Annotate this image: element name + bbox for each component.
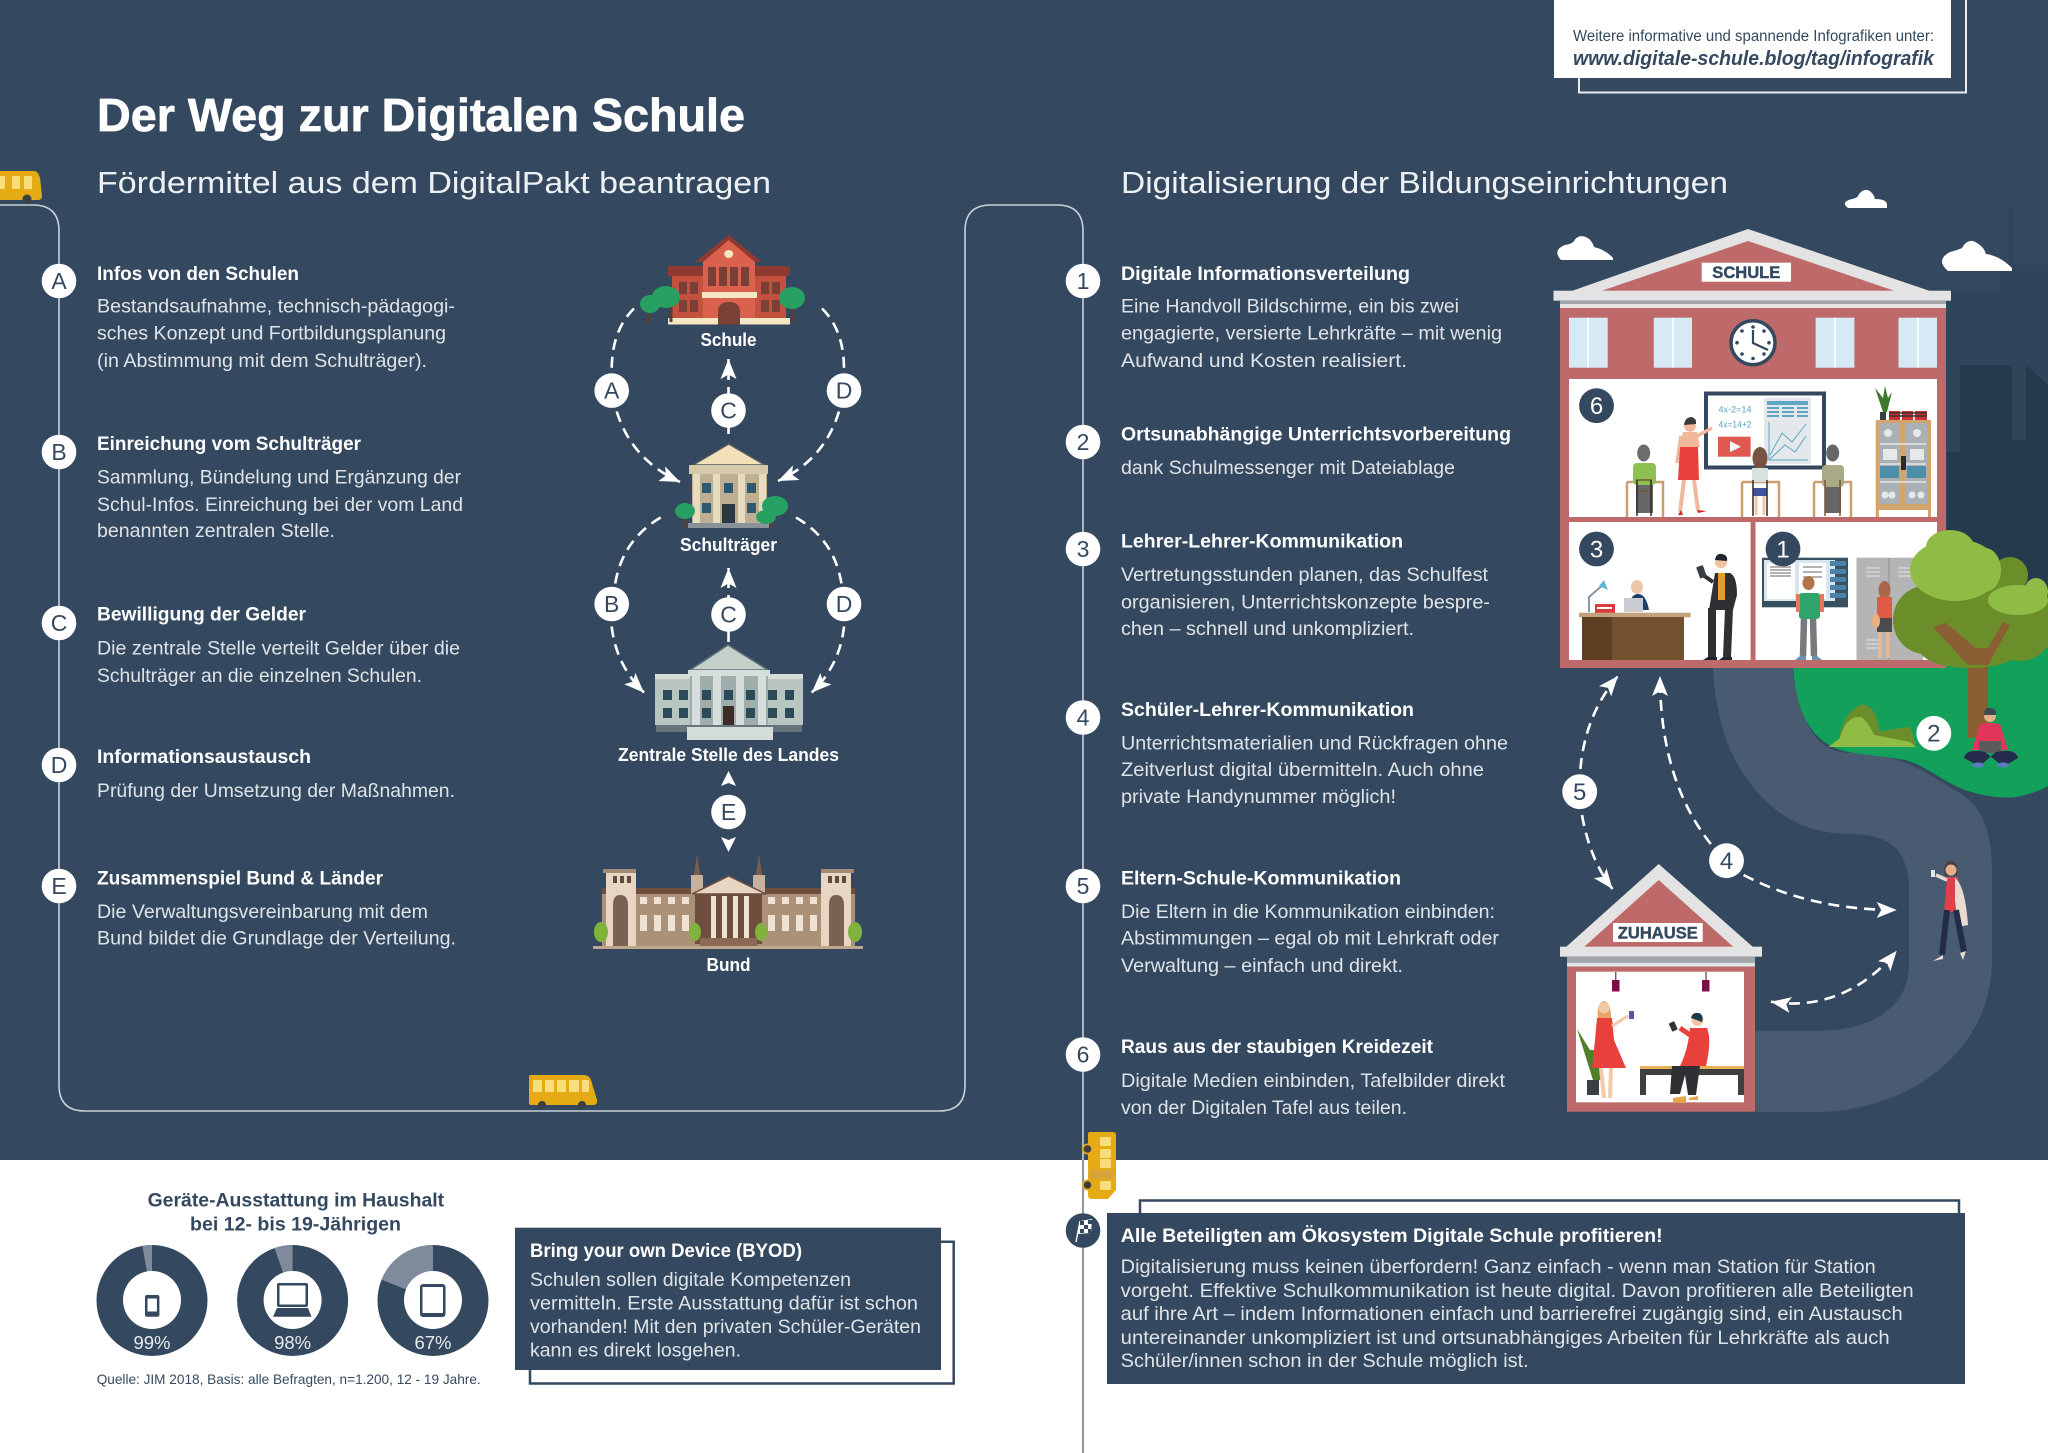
step C: C — [51, 610, 67, 636]
step 4 — [1066, 700, 1508, 808]
BYOD callout: vermitteln. Erste Ausstattung dafür ist schon — [530, 1292, 918, 1314]
step C: Die zentrale Stelle verteilt Gelder über die — [97, 638, 460, 660]
step 2: dank Schulmessenger mit Dateiablage — [1121, 457, 1455, 479]
step E: Die Verwaltungsvereinbarung mit dem — [97, 901, 428, 923]
final callout: vorgeht. Effektive Schulkommunikation ist heute digital. Davon profitieren alle Beteiligten — [1121, 1280, 1914, 1302]
BYOD callout: vorhanden! Mit den privaten Schüler-Geräten — [530, 1316, 921, 1338]
person under tree — [1964, 708, 2018, 768]
subtitle right: Digitalisierung der Bildungseinrichtungen — [1121, 165, 1728, 200]
step E: E — [51, 873, 67, 899]
main title: Der Weg zur Digitalen Schule — [97, 89, 745, 141]
bush — [1828, 705, 1916, 747]
donut: laptop 98% — [237, 1245, 348, 1356]
donut: laptop 98%: 98% — [274, 1332, 311, 1353]
donut: smartphone 99% — [96, 1245, 208, 1356]
final callout: Alle Beteiligten am Ökosystem Digitale Schule profitieren! — [1121, 1224, 1663, 1247]
final callout: auf ihre Art – indem Informationen einfach und barrierefrei zugängig sind, ein Austausch — [1121, 1303, 1903, 1325]
step E: Bund bildet die Grundlage der Verteilung. — [97, 928, 456, 950]
step 4: Zeitverlust digital übermitteln. Auch ohne — [1121, 759, 1484, 781]
step 3: Lehrer-Lehrer-Kommunikation — [1121, 532, 1403, 552]
step A: A — [51, 268, 67, 294]
building: Schulträger — [675, 444, 788, 528]
funding flow arrows — [612, 308, 844, 852]
student 2 — [1742, 447, 1780, 517]
plant — [1577, 1029, 1601, 1095]
device statistics heading — [148, 1190, 445, 1236]
walking woman — [1931, 861, 1968, 961]
tree — [1893, 530, 2048, 738]
step B: Sammlung, Bündelung und Ergänzung der — [97, 466, 461, 488]
step 4: Unterrichtsmaterialien und Rückfragen ohne — [1121, 732, 1508, 754]
step C — [42, 604, 460, 687]
link box: Weitere informative und spannende Infografiken unter: — [1573, 28, 1934, 45]
step 6: Raus aus der staubigen Kreidezeit — [1121, 1037, 1434, 1058]
BYOD callout: Bring your own Device (BYOD) — [530, 1240, 802, 1262]
flow badges: C — [720, 398, 737, 424]
notice screen — [1762, 558, 1848, 607]
map badges — [1562, 716, 1951, 878]
sign: ZUHAUSE: ZUHAUSE — [1618, 924, 1698, 942]
step 3: chen – schnell und unkompliziert. — [1121, 618, 1414, 640]
step 5: Eltern-Schule-Kommunikation — [1121, 868, 1401, 890]
step D: Prüfung der Umsetzung der Maßnahmen. — [97, 780, 455, 802]
step 6: Digitale Medien einbinden, Tafelbilder direkt — [1121, 1070, 1506, 1092]
step C: Bewilligung der Gelder — [97, 604, 307, 626]
step D: Informationsaustausch — [97, 747, 311, 768]
lawn — [1793, 640, 2048, 797]
bus bottom — [529, 1075, 597, 1109]
digital board: 4x-2=14 — [1718, 404, 1752, 416]
building: Zentrale Stelle — [655, 645, 803, 740]
donut: smartphone 99%: 99% — [133, 1332, 171, 1353]
donut: tablet 67%: 67% — [414, 1332, 452, 1353]
final callout: Schüler/innen schon in der Schule möglich ist. — [1121, 1350, 1529, 1372]
subtitle left: Fördermittel aus dem DigitalPakt beantragen — [97, 165, 771, 200]
room badges: 1 — [1776, 536, 1790, 564]
BYOD callout: Schulen sollen digitale Kompetenzen — [530, 1269, 851, 1291]
school building — [1554, 229, 1951, 668]
room badges: 3 — [1590, 536, 1603, 564]
man on bench — [1640, 1013, 1744, 1103]
white bottom section — [0, 1160, 2048, 1453]
flow badges: A — [604, 378, 620, 404]
step 3: Vertretungsstunden planen, das Schulfest — [1121, 564, 1489, 586]
dark background — [0, 0, 2048, 1160]
step 3 — [1066, 532, 1490, 640]
lab cabinet — [1875, 386, 1931, 517]
final callout — [1107, 1200, 1965, 1384]
student 1 — [1627, 444, 1664, 517]
map badges: 5 — [1573, 779, 1586, 806]
BYOD callout: kann es direkt losgehen. — [530, 1340, 741, 1362]
step B: Einreichung vom Schulträger — [97, 434, 362, 455]
link box — [1554, 0, 1966, 92]
flow badges: C — [720, 602, 737, 628]
step B — [42, 434, 463, 542]
communication arrows — [1580, 676, 1897, 1004]
map badges: 4 — [1720, 848, 1733, 875]
step 1: Aufwand und Kosten realisiert. — [1121, 350, 1407, 372]
flow badges: D — [836, 378, 852, 404]
step 5 — [1066, 868, 1500, 977]
step 6 — [1066, 1037, 1506, 1119]
step B: Schul-Infos. Einreichung bei der vom Land — [97, 494, 463, 516]
step D — [42, 747, 455, 802]
flow badges: B — [604, 591, 619, 617]
house Zuhause — [1560, 864, 1762, 1112]
step 1: Eine Handvoll Bildschirme, ein bis zwei — [1121, 296, 1459, 318]
label Bund: Bund — [706, 955, 750, 975]
flow badges — [594, 373, 861, 829]
step 5: Verwaltung – einfach und direkt. — [1121, 955, 1403, 977]
map badges: 2 — [1927, 720, 1940, 748]
step A: (in Abstimmung mit dem Schulträger). — [97, 350, 427, 372]
step 1: 1 — [1077, 268, 1089, 294]
step E: Zusammenspiel Bund & Länder — [97, 868, 384, 890]
donut: tablet 67% — [378, 1245, 488, 1356]
woman in dress — [1592, 1001, 1634, 1098]
step 6: 6 — [1077, 1042, 1089, 1068]
student 3 — [1814, 444, 1852, 517]
room badges — [1579, 388, 1800, 566]
clouds — [1557, 190, 2012, 271]
step 3: 3 — [1077, 536, 1089, 562]
step 4: 4 — [1077, 704, 1090, 730]
step A: Bestandsaufnahme, technisch-pädagogi- — [97, 296, 455, 318]
final callout: untereinander unkompliziert ist und ortsunabhängiges Arbeiten für Lehrkräfte als auch — [1121, 1327, 1890, 1349]
office desk scene — [1579, 580, 1690, 660]
teacher — [1677, 417, 1712, 515]
windows — [1569, 318, 1937, 368]
step 3: organisieren, Unterrichtskonzepte bespre- — [1121, 592, 1490, 614]
label Zentrale Stelle des Landes: Zentrale Stelle des Landes — [618, 745, 839, 765]
link box: www.digitale-schule.blog/tag/infografik — [1573, 48, 1935, 70]
background skyline — [1947, 208, 2048, 660]
flow badges: E — [721, 799, 736, 825]
flow badges: D — [836, 591, 852, 617]
BYOD callout — [515, 1228, 954, 1384]
source note: Quelle: JIM 2018, Basis: alle Befragten, n=1.200, 12 - 19 Jahre. — [97, 1371, 481, 1387]
step 2: 2 — [1077, 429, 1089, 455]
label Schulträger: Schulträger — [680, 535, 777, 555]
step 1: Digitale Informationsverteilung — [1121, 264, 1410, 285]
step 4: private Handynummer möglich! — [1121, 786, 1396, 808]
road — [1713, 668, 1992, 1112]
step 4: Schüler-Lehrer-Kommunikation — [1121, 700, 1414, 721]
step 6: von der Digitalen Tafel aus teilen. — [1121, 1097, 1407, 1119]
man with phone — [1696, 554, 1737, 660]
flag badge — [1066, 1213, 1100, 1248]
step 5: Die Eltern in die Kommunikation einbinden: — [1121, 901, 1495, 923]
route line lower part — [1082, 1160, 1084, 1453]
device statistics heading: Geräte-Ausstattung im Haushalt — [148, 1190, 445, 1212]
lockers — [1856, 558, 1923, 660]
final callout: Digitalisierung muss keinen überfordern! Ganz einfach - wenn man Station für Station — [1121, 1256, 1876, 1278]
step 5: 5 — [1077, 873, 1089, 899]
sign: SCHULE: SCHULE — [1712, 264, 1780, 282]
step 1: engagierte, versierte Lehrkräfte – mit wenig — [1121, 322, 1502, 344]
building: Schule — [640, 235, 805, 324]
step E — [42, 868, 456, 950]
step A: sches Konzept und Fortbildungsplanung — [97, 322, 446, 344]
route line — [0, 205, 1083, 1160]
step B: B — [51, 439, 67, 465]
step C: Schulträger an die einzelnen Schulen. — [97, 665, 422, 687]
digital board: 4x=14+2 — [1718, 420, 1752, 430]
device statistics heading: bei 12- bis 19-Jährigen — [190, 1214, 401, 1236]
step 1 — [1066, 264, 1502, 372]
digital board — [1706, 394, 1824, 468]
clock — [1731, 321, 1775, 365]
step 2: Ortsunabhängige Unterrichtsvorbereitung — [1121, 424, 1511, 446]
bus top left — [0, 171, 42, 204]
student at screen — [1795, 576, 1824, 660]
step 2 — [1066, 424, 1511, 479]
label Schule: Schule — [700, 330, 756, 350]
step B: benannten zentralen Stelle. — [97, 520, 335, 542]
building: Bund — [593, 854, 863, 949]
step A — [42, 264, 455, 372]
step A: Infos von den Schulen — [97, 264, 299, 285]
bus vertical — [1082, 1132, 1116, 1199]
step 5: Abstimmungen – egal ob mit Lehrkraft oder — [1121, 928, 1500, 950]
rooms — [1569, 379, 1937, 660]
lamps — [1612, 972, 1710, 992]
room badges: 6 — [1590, 393, 1603, 420]
step D: D — [51, 752, 67, 778]
